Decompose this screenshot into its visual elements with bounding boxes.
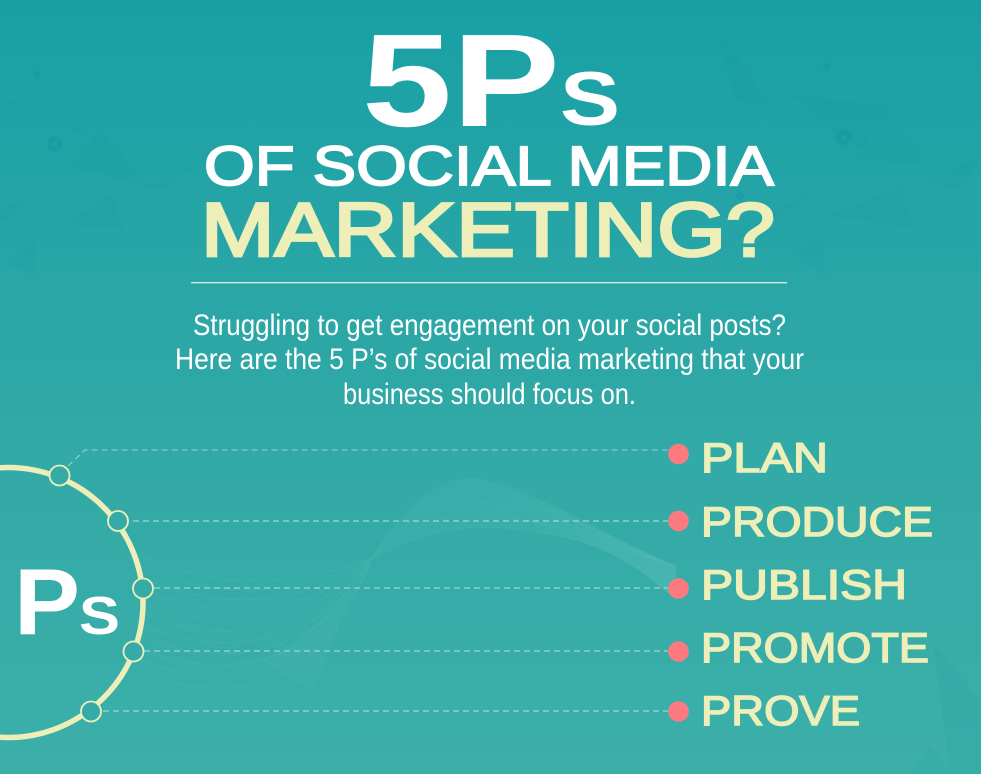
title: 5Ps: 5P: [362, 7, 560, 154]
list of five Ps: PROMOTE: [701, 624, 929, 671]
title: 5Ps: [362, 7, 620, 154]
ring arc: [0, 468, 143, 738]
divider rule: [191, 282, 787, 283]
ring diagram: [0, 466, 153, 738]
ring nodes: [50, 466, 153, 722]
intro paragraph: [175, 309, 804, 411]
ring label: Ps: [14, 549, 120, 654]
intro paragraph: Here are the 5 P’s of social media marketing that your: [175, 343, 804, 376]
intro paragraph: business should focus on.: [343, 378, 636, 411]
background wave band: [140, 478, 676, 690]
intro paragraph: Struggling to get engagement on your social posts?: [193, 309, 786, 342]
title: of social media: OF SOCIAL MEDIA: [204, 134, 775, 197]
list of five Ps: PRODUCE: [701, 498, 933, 545]
title: marketing: MARKETING?: [201, 188, 775, 273]
list of five Ps: [701, 434, 933, 734]
ring label: Ps: P: [14, 549, 80, 654]
list of five Ps: PUBLISH: [701, 561, 907, 608]
list of five Ps: PLAN: [701, 434, 828, 481]
dashed connectors: [68, 450, 668, 711]
ring label: Ps: S: [79, 586, 120, 646]
title: 5Ps: S: [560, 57, 620, 142]
list of five Ps: PROVE: [701, 687, 860, 734]
pink marker dots: [668, 444, 689, 722]
